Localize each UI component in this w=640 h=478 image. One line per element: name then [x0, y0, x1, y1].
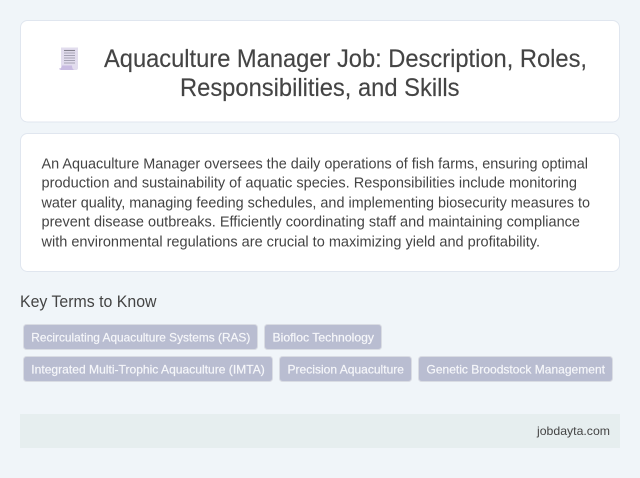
tag: precision: [280, 356, 412, 382]
footer bar: [20, 414, 620, 448]
description text: with environmental regulations are crucial to maximizing yield and profitability.: [40, 234, 540, 250]
description text: An Aquaculture Manager oversees the daily operations of fish farms, ensuring optimal: [42, 156, 588, 172]
description text: prevent disease outbreaks. Efficiently coordinating staff and maintaining compliance: [42, 215, 580, 231]
description text: [40, 156, 590, 250]
panel: title card: [20, 20, 620, 122]
tag: broodstock: [418, 356, 612, 382]
panel: key term tags: [24, 324, 612, 382]
title card background: [20, 20, 620, 122]
heading: [104, 45, 587, 102]
footer site name: jobdayta.com: [536, 424, 610, 438]
panel: footer: [20, 414, 620, 448]
tag: biofloc: [264, 324, 382, 350]
description text: water quality, managing feeding schedules, and implementing biosecurity measures to: [40, 195, 590, 211]
tag: IMTA: Integrated Multi-Trophic Aquaculture (IMTA): [31, 362, 265, 376]
description text: production and sustainability of aquatic species. Responsibilities include monitoring: [42, 176, 577, 192]
tag: precision: Precision Aquaculture: [288, 362, 404, 376]
icon: document scroll: [59, 48, 78, 70]
panel: description card: [20, 134, 620, 272]
tag: IMTA: [24, 356, 272, 382]
tag: RAS: Recirculating Aquaculture Systems (RAS): [31, 330, 250, 344]
tag: biofloc: Biofloc Technology: [272, 330, 374, 344]
heading: key terms: Key Terms to Know: [20, 293, 157, 311]
heading: Aquaculture Manager Job: Description, Roles,: [104, 45, 587, 73]
tag: RAS: [24, 324, 258, 350]
tag: broodstock: Genetic Broodstock Management: [426, 362, 606, 376]
description card background: [20, 134, 620, 272]
heading: Responsibilities, and Skills: [180, 74, 460, 102]
